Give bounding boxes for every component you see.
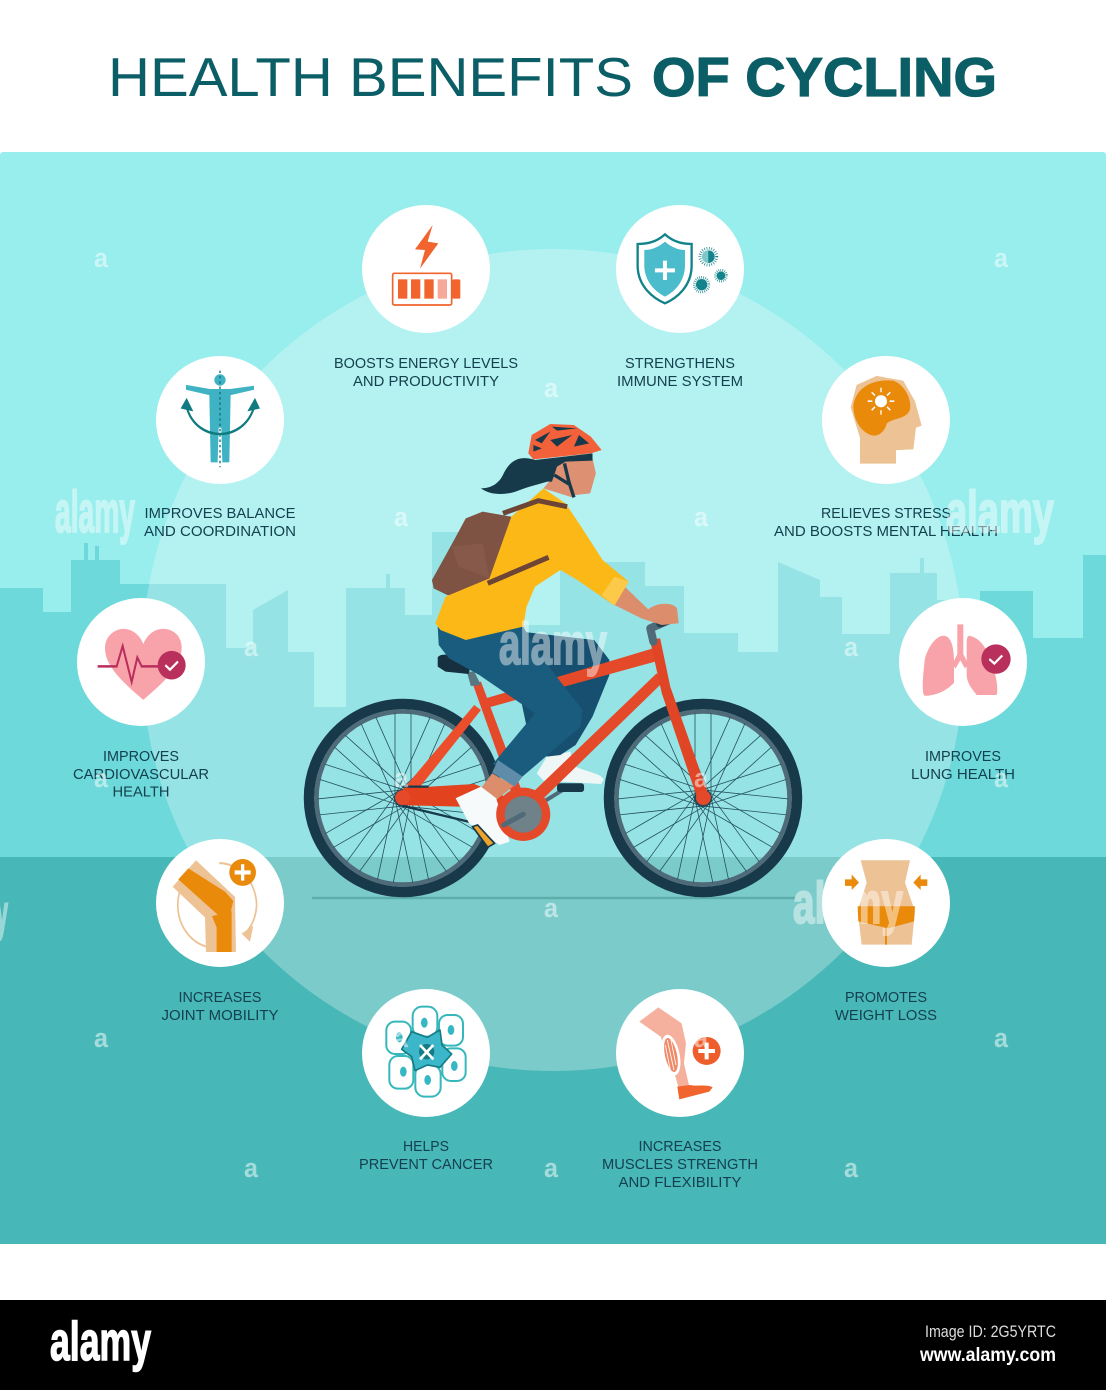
front wheel [609,704,797,892]
label [911,749,1015,783]
city skyline [0,532,1106,860]
label: HEALTH [112,784,170,800]
label: CARDIOVASCULAR [73,767,209,783]
hubs [395,790,410,805]
near shoe [456,787,510,845]
frame: seat stay [400,705,481,802]
frame: chain guard [403,784,513,815]
trouser cuff [492,760,523,787]
label: IMMUNE SYSTEM [617,374,743,390]
footer logo: alamy [50,1310,151,1372]
panel: city background [0,152,1106,1244]
neck and face [544,458,596,497]
watermarks: a [544,1153,559,1183]
ankle [481,773,514,800]
chainring [496,788,550,841]
watermarks: a [544,373,559,403]
watermarks: a [994,243,1009,273]
footer bar [0,1300,1106,1390]
benefit: lung health [899,598,1027,783]
label [602,1139,758,1191]
handlebar [650,619,671,642]
bike shadow [312,897,795,899]
near pedal [473,825,494,847]
watermarks: alamy [499,612,607,677]
label: BOOSTS ENERGY LEVELS [334,356,518,372]
chain [403,787,473,823]
label: STRENGTHENS [625,356,735,372]
benefit: relieves stress [774,356,998,540]
label: AND FLEXIBILITY [618,1175,742,1191]
benefit: joint mobility [156,839,284,1024]
benefit: weight loss [822,839,950,1024]
title [108,46,997,108]
backpack flap [452,543,489,578]
benefit: cardiovascular health [73,598,209,800]
ground [0,857,1106,1244]
frame: down tube [527,673,663,807]
icon: head with brain and sun [851,376,922,464]
yellow jacket [435,488,629,640]
far leg [506,630,609,757]
icon: knee joint [173,859,257,952]
watermarks: a [394,1023,409,1053]
watermarks: a [94,1023,109,1053]
icon: balancing figure [181,371,260,467]
label: MUSCLES STRENGTH [602,1157,758,1173]
label: JOINT MOBILITY [162,1008,279,1024]
label: WEIGHT LOSS [835,1008,937,1024]
title: HEALTH BENEFITS [108,46,633,108]
label: RELIEVES STRESS [821,506,951,522]
icon: cells [386,1007,466,1097]
label [162,990,279,1024]
backpack [432,512,511,598]
sleeve cuff [602,577,629,606]
watermarks: alamy [793,871,903,936]
benefit: strengthens immune system [616,205,744,390]
rear wheel [309,704,497,892]
image id: Image ID: 2G5YRTC [925,1322,1056,1341]
label: IMPROVES [103,749,179,765]
crank [504,814,523,825]
illustration: woman riding a bicycle [309,424,797,892]
ponytail [481,458,552,494]
benefit: helps prevent cancer [359,989,493,1173]
benefit: improves balance [144,356,296,540]
watermarks: a [694,502,709,532]
icon: lungs [923,624,1011,696]
label: INCREASES [638,1139,722,1155]
label [334,356,518,390]
watermarks: a [94,763,109,793]
watermarks: a [244,632,259,662]
label [359,1139,493,1173]
watermarks: a [544,893,559,923]
bicycle and rider [395,424,711,847]
watermarks: a [994,763,1009,793]
saddle [438,655,471,674]
website: www.alamy.com [919,1345,1056,1366]
frame: seat tube [473,682,528,812]
benefit: boosts energy levels [334,205,518,390]
near leg [438,627,582,778]
watermarks [0,243,1054,1183]
watermarks: a [394,502,409,532]
backpack straps [488,501,567,583]
label [835,990,937,1024]
label: HELPS [403,1139,449,1155]
icon: waist [845,860,927,945]
label: PREVENT CANCER [359,1157,493,1173]
helmet strap [554,463,574,497]
watermarks: a [94,243,109,273]
label [73,749,209,800]
label: PROMOTES [845,990,927,1006]
frame: head tube and fork [650,638,709,798]
watermarks: a [694,1023,709,1053]
label: AND PRODUCTIVITY [353,374,499,390]
central light circle [142,249,964,1071]
hair [535,453,593,482]
far pedal [523,783,584,814]
helmet vents [533,427,589,452]
frame: top tube [486,647,661,707]
label: IMPROVES [925,749,1001,765]
label: IMPROVES BALANCE [144,506,296,522]
title: OF CYCLING [652,46,997,108]
label: AND BOOSTS MENTAL HEALTH [774,524,998,540]
seat post [467,672,481,686]
watermarks: a [844,632,859,662]
icon: battery and lightning bolt [393,225,460,305]
benefit: muscle strength [602,989,758,1191]
watermarks: a [844,1153,859,1183]
watermarks: a [994,1023,1009,1053]
label: AND COORDINATION [144,524,296,540]
icon: heart with pulse [98,629,186,700]
label: LUNG HEALTH [911,767,1015,783]
helmet [528,424,602,459]
icon: shield and viruses [638,234,727,303]
watermarks: a [394,763,409,793]
watermarks: a [694,763,709,793]
arm and hand [614,587,679,625]
watermarks: alamy [55,480,135,545]
label [774,506,998,540]
icon: leg muscle [639,1007,721,1099]
watermarks: a [244,1153,259,1183]
label [617,356,743,390]
label [144,506,296,540]
far shoe [537,752,604,784]
watermarks: alamy [946,480,1054,545]
label: INCREASES [178,990,262,1006]
